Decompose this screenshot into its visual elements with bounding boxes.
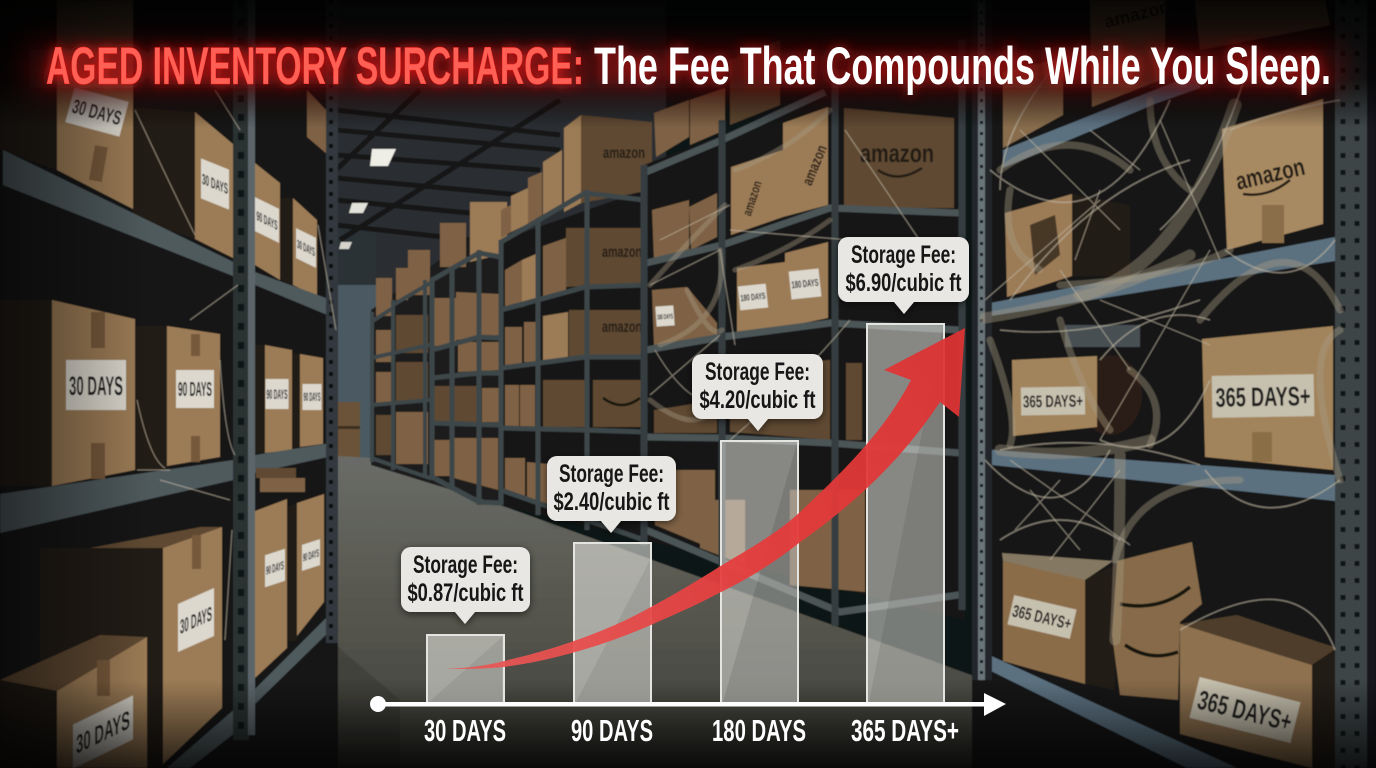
right rack: 365 DAYS+ [1023, 391, 1083, 412]
rack A near center: amazon [799, 143, 831, 188]
rack B with amazon boxes [501, 115, 652, 540]
title: AGED INVENTORY SURCHARGE: [46, 37, 584, 96]
right rack: 365 DAYS+ [1195, 685, 1295, 737]
bar: 365 days+ [867, 324, 944, 703]
bar: 180 days [721, 441, 798, 703]
timeline axis arrow [370, 693, 1006, 716]
box labels left: 90 DAYS [266, 558, 284, 578]
callout: 365 days fee: $6.90/cubic ft [846, 269, 962, 297]
callout: 365 days fee [838, 237, 969, 314]
box labels left: 30 DAYS [76, 704, 130, 760]
callout: 90 days fee [547, 456, 676, 533]
right rack: 365 DAYS+ [1215, 381, 1311, 413]
right rack [972, 0, 1376, 768]
box labels left: 30 DAYS [202, 171, 228, 198]
far center racks [371, 202, 507, 505]
bar: 90 days [574, 543, 651, 703]
left rack: 90 DAYS [303, 548, 319, 565]
cobwebs [1080, 105, 1235, 295]
axis labels: 365 DAYS+ [851, 713, 959, 748]
box labels left: 30 DAYS [297, 237, 315, 259]
rack A near center: 180 DAYS [740, 291, 766, 303]
title [30, 37, 1340, 96]
box labels left [65, 87, 321, 768]
box labels left: 30 DAYS [69, 371, 123, 401]
axis labels [424, 713, 959, 748]
rack A near center: amazon [860, 138, 934, 168]
callout: 180 days fee: Storage Fee: [705, 358, 810, 386]
callout: 180 days fee: $4.20/cubic ft [700, 386, 816, 414]
callout: 30 days fee: $0.87/cubic ft [408, 579, 524, 607]
box labels left: 90 DAYS [178, 379, 212, 401]
axis labels: 180 DAYS [712, 713, 806, 748]
callout: 30 days fee [401, 547, 530, 624]
left rack [0, 0, 338, 768]
axis labels: 90 DAYS [571, 713, 653, 748]
box labels left: 30 DAYS [70, 96, 124, 130]
rack A near center: amazon [739, 179, 765, 218]
right rack: 365 DAYS+ [1011, 601, 1073, 634]
callout: 30 days fee: Storage Fee: [413, 551, 518, 579]
callout: 365 days fee: Storage Fee: [851, 241, 956, 269]
bar: 30 days [427, 635, 504, 703]
rising red arrow [445, 328, 965, 669]
title: AGED INVENTORY SURCHARGE: [46, 37, 584, 96]
floor [190, 456, 1200, 768]
callout: 90 days fee: $2.40/cubic ft [554, 488, 670, 516]
box labels left: 90 DAYS [266, 386, 288, 402]
right rack: amazon [1233, 153, 1308, 196]
rack B with amazon boxes: amazon [602, 319, 642, 336]
box labels left: 30 DAYS [180, 603, 212, 639]
left rack: 90 DAYS [304, 390, 320, 404]
bar chart: storage fee by age [370, 237, 1006, 748]
callout: 180 days fee [692, 354, 823, 431]
rack B with amazon boxes: amazon [602, 244, 642, 261]
rack A near center: 180 DAYS [657, 313, 673, 322]
rack A near center [644, 40, 965, 626]
rack B with amazon boxes: amazon [603, 145, 645, 162]
ceiling and back wall [336, 0, 666, 460]
rack A near center: 180 DAYS [791, 278, 819, 291]
callout: 90 days fee: Storage Fee: [559, 460, 664, 488]
axis labels: 30 DAYS [424, 713, 506, 748]
box labels left: 90 DAYS [256, 209, 278, 233]
